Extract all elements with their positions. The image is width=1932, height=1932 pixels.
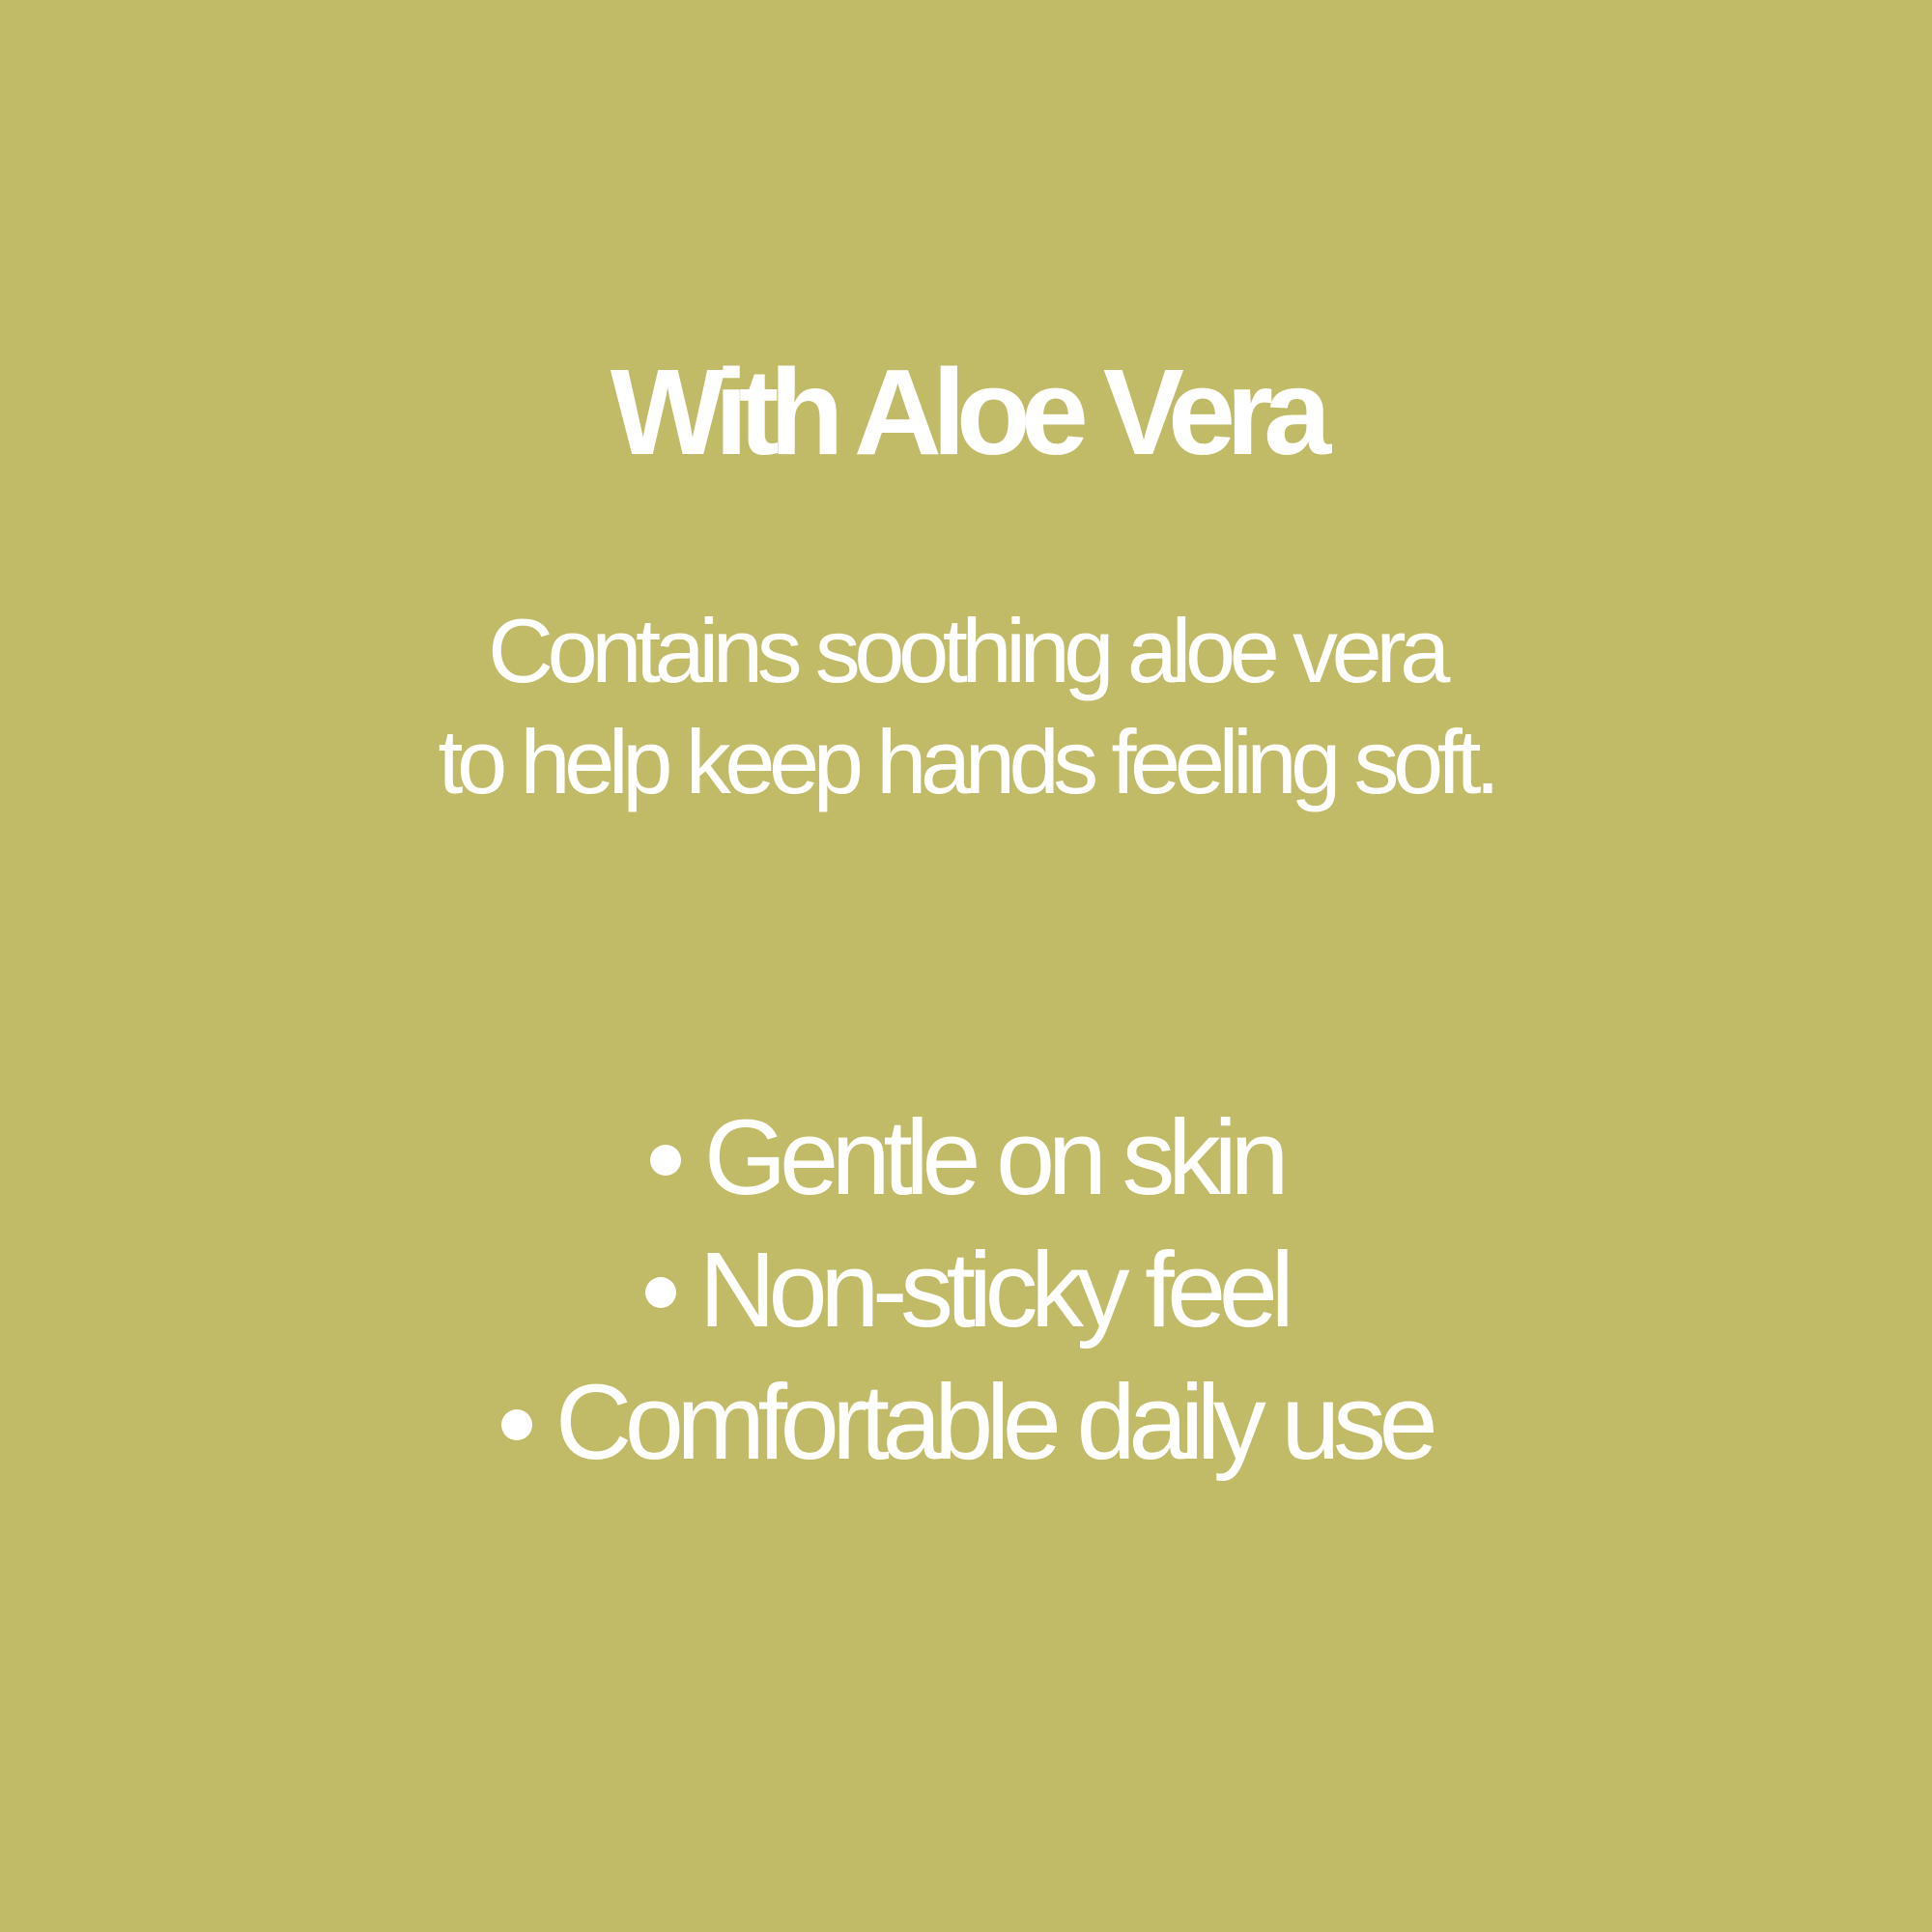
subtitle text block: Contains soothing aloe vera [488, 600, 1444, 701]
subtitle text block [438, 600, 1494, 812]
bullet: gentle on skin: Gentle on skin [704, 1098, 1282, 1217]
bullet: comfortable daily use: Comfortable daily use [555, 1363, 1431, 1482]
subtitle text block: to help keep hands feeling soft. [438, 711, 1494, 812]
title: With Aloe Vera [611, 344, 1321, 480]
bullet list [501, 1098, 1434, 1482]
bullet: non-sticky feel: Non-sticky feel [699, 1231, 1287, 1350]
